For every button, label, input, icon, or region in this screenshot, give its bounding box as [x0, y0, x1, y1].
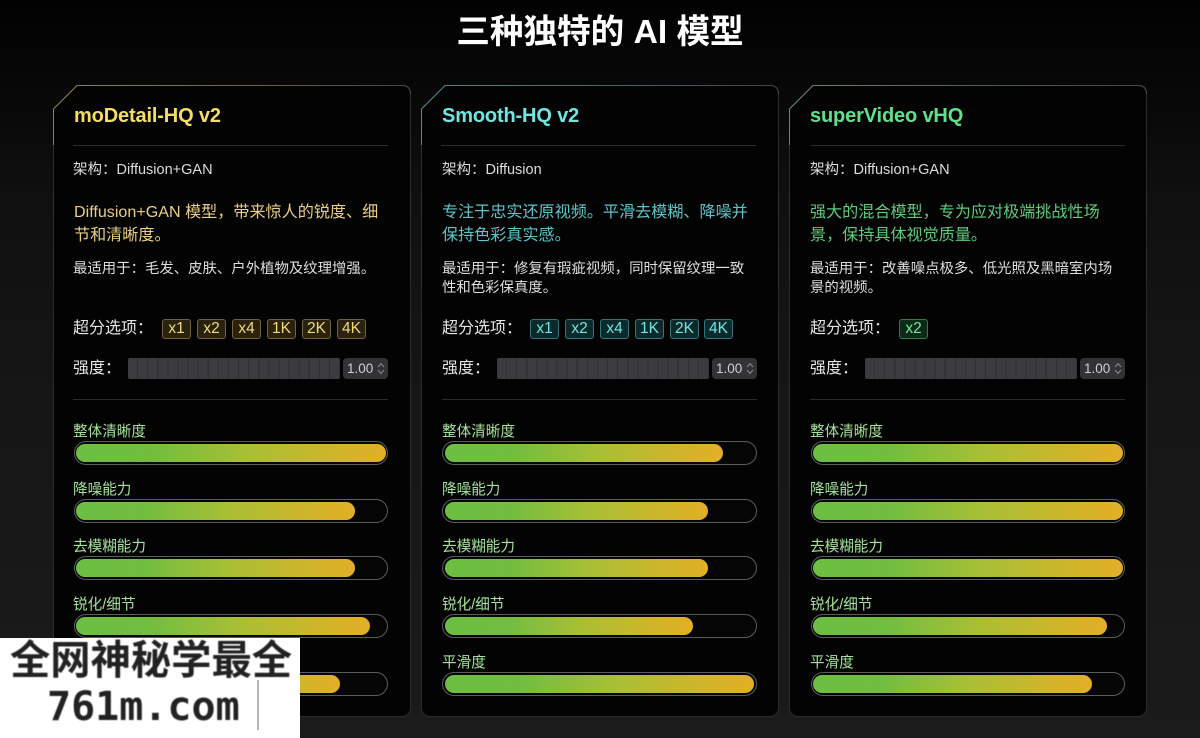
upscale label: 超分选项： [810, 320, 890, 337]
best for [442, 260, 744, 296]
best for: 最适用于：改善噪点极多、低光照及黑暗室内场 [810, 261, 1112, 277]
metric: sharpening: 锐化/细节 [73, 597, 135, 613]
metric: overall clarity: 整体清晰度 [442, 424, 515, 440]
description [74, 203, 378, 244]
title: 三种独特的 AI 模型 [456, 14, 744, 51]
best for: 最适用于：修复有瑕疵视频，同时保留纹理一致 [442, 261, 744, 277]
strength slider [865, 358, 1077, 379]
upscale label: 超分选项： [73, 320, 153, 337]
metric: deblur [810, 538, 1125, 580]
description [810, 203, 1100, 244]
strength value [1080, 358, 1125, 379]
description: 保持色彩真实感。 [442, 226, 571, 244]
upscale options: x2 [905, 320, 922, 337]
strength value: 1.00 [716, 361, 742, 376]
metric: sharpening: 锐化/细节 [442, 597, 504, 613]
metric: smoothness: 平滑度 [73, 655, 117, 671]
watermark [0, 638, 300, 738]
metric: deblur: 去模糊能力 [442, 539, 515, 555]
strength label: 强度： [442, 360, 490, 377]
metric: deblur [73, 538, 388, 580]
metric: denoise: 降噪能力 [73, 482, 131, 498]
best for: 最适用于：毛发、皮肤、户外植物及纹理增强。 [73, 261, 375, 277]
metric: sharpening: 锐化/细节 [810, 597, 872, 613]
metric: deblur: 去模糊能力 [810, 539, 883, 555]
architecture: 架构：Diffusion+GAN [73, 162, 213, 178]
metric: overall clarity: 整体清晰度 [73, 424, 146, 440]
strength value: 1.00 [1084, 361, 1110, 376]
best for: 性和色彩保真度。 [442, 280, 557, 296]
metric: sharpening [73, 596, 388, 638]
panel: Smooth-HQ v2 [421, 85, 779, 717]
upscale options [162, 319, 366, 339]
upscale options: x4 [606, 320, 623, 337]
upscale options: x2 [203, 320, 220, 337]
best for: 景的视频。 [810, 280, 882, 296]
metric: deblur: 去模糊能力 [73, 539, 146, 555]
upscale options: 4K [709, 320, 728, 337]
description: 强大的混合模型，专为应对极端挑战性场 [810, 203, 1100, 221]
upscale options: 2K [307, 320, 326, 337]
metric: overall clarity [442, 423, 757, 465]
strength value [712, 358, 757, 379]
strength slider [128, 358, 340, 379]
metric: denoise [73, 481, 388, 523]
description: 景，保持具体视觉质量。 [810, 226, 987, 244]
strength label: 强度： [810, 360, 858, 377]
best for [810, 260, 1112, 296]
model name: superVideo vHQ [810, 105, 963, 127]
model name: Smooth-HQ v2 [442, 105, 579, 127]
panel: superVideo vHQ [789, 85, 1147, 717]
architecture: 架构：Diffusion [442, 162, 542, 178]
strength value [343, 358, 388, 379]
upscale options: x4 [238, 320, 255, 337]
description [442, 203, 748, 244]
upscale options: 1K [640, 320, 659, 337]
upscale options [530, 319, 733, 339]
description: Diffusion+GAN 模型，带来惊人的锐度、细 [74, 203, 378, 221]
strength slider [497, 358, 709, 379]
watermark: 全网神秘学最全 [10, 638, 292, 683]
description: 节和清晰度。 [74, 226, 171, 244]
metric: smoothness [810, 654, 1125, 696]
upscale label: 超分选项： [442, 320, 522, 337]
metric: overall clarity [73, 423, 388, 465]
metric: smoothness [442, 654, 757, 696]
metric: overall clarity: 整体清晰度 [810, 424, 883, 440]
metric: deblur [442, 538, 757, 580]
metric: sharpening [442, 596, 757, 638]
strength label: 强度： [73, 360, 121, 377]
upscale options: 1K [272, 320, 291, 337]
metric: denoise [442, 481, 757, 523]
description: 专注于忠实还原视频。平滑去模糊、降噪并 [442, 203, 748, 221]
upscale options: 2K [675, 320, 694, 337]
upscale options: x1 [168, 320, 185, 337]
metric: smoothness: 平滑度 [810, 655, 854, 671]
architecture: 架构：Diffusion+GAN [810, 162, 950, 178]
model name: moDetail-HQ v2 [74, 105, 221, 127]
metric: denoise: 降噪能力 [810, 482, 868, 498]
metric: sharpening [810, 596, 1125, 638]
strength value: 1.00 [347, 361, 373, 376]
metric: smoothness [73, 655, 388, 696]
watermark: 761m.com [47, 684, 240, 730]
metric: overall clarity [810, 423, 1125, 465]
upscale options: x2 [571, 320, 588, 337]
upscale options: x1 [536, 320, 553, 337]
metric: denoise: 降噪能力 [442, 482, 500, 498]
upscale options: 4K [342, 320, 361, 337]
metric: smoothness: 平滑度 [442, 655, 486, 671]
panel: moDetail-HQ v2 [53, 85, 411, 717]
metric: denoise [810, 481, 1125, 523]
